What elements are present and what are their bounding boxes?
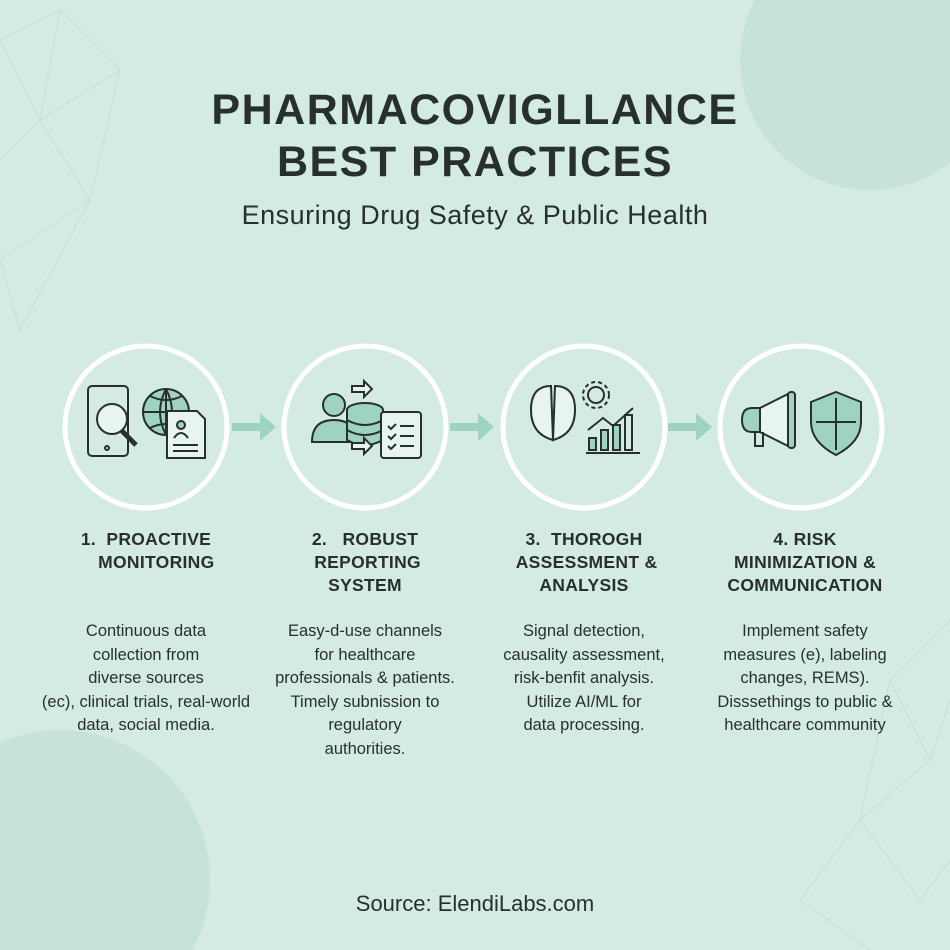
icon: reporting [312, 381, 421, 458]
step 4 heading: COMMUNICATION [727, 575, 883, 595]
step 1 heading: 1. PROACTIVE [81, 529, 211, 549]
step 1 heading: MONITORING [98, 552, 215, 572]
step 3 text: causality assessment, [503, 646, 665, 664]
step 1 text: data, social media. [77, 716, 215, 734]
step 2 text: Easy-d-use channels [288, 622, 442, 640]
step 3 heading: 3. THOROGH [525, 529, 643, 549]
title [211, 86, 739, 186]
step 2 heading: SYSTEM [328, 575, 402, 595]
source footer: Source: ElendiLabs.com [356, 891, 594, 916]
step 3 text [503, 622, 665, 734]
step 3 text: Utilize AI/ML for [527, 692, 641, 710]
icon: analysis [531, 382, 640, 453]
step 2 heading: REPORTING [314, 552, 421, 572]
step 2 text: authorities. [325, 740, 405, 758]
step 2 text: Timely subnission to [291, 692, 439, 710]
step 3 heading: ANALYSIS [539, 575, 629, 595]
icon: communication [742, 392, 861, 455]
step 4 text: changes, REMS). [740, 669, 870, 687]
step 1 text: diverse sources [88, 669, 204, 687]
step 4 heading: 4. RISK [773, 529, 837, 549]
process diagram [62, 344, 884, 510]
step 1 text: collection from [93, 646, 199, 664]
title: BEST PRACTICES [277, 138, 673, 186]
icon: monitoring [88, 386, 205, 458]
step 4 heading [727, 529, 883, 595]
step 3 heading [516, 529, 657, 595]
step 4 text: measures (e), labeling [723, 646, 887, 664]
step 4 heading: MINIMIZATION & [734, 552, 876, 572]
step 2 heading: 2. ROBUST [312, 529, 418, 549]
step 3 text: risk-benfit analysis. [514, 669, 654, 687]
arrows [232, 413, 712, 441]
step 2 text: professionals & patients. [275, 669, 455, 687]
title: PHARMACOVIGLLANCE [211, 86, 739, 134]
step 1 text: Continuous data [86, 622, 206, 640]
step 3 text: Signal detection, [523, 622, 645, 640]
step 2 heading [312, 529, 421, 595]
step 3 heading: ASSESSMENT & [516, 552, 657, 572]
step 2 text: regulatory [328, 716, 402, 734]
subtitle: Ensuring Drug Safety & Public Health [242, 200, 708, 230]
step 4 text: Dissseth­ings to public & [717, 692, 893, 710]
step 4 text: Implement safety [742, 622, 868, 640]
step 2 text: for healthcare [315, 646, 415, 664]
step 4 text [717, 622, 893, 734]
step 3 text: data processing. [523, 716, 645, 734]
step 1 heading [81, 529, 215, 572]
step 2 text [275, 622, 455, 758]
step 4 text: healthcare community [724, 716, 886, 734]
step 1 text: (ec), clinical trials, real-world [42, 692, 250, 710]
step 1 text [42, 622, 250, 734]
